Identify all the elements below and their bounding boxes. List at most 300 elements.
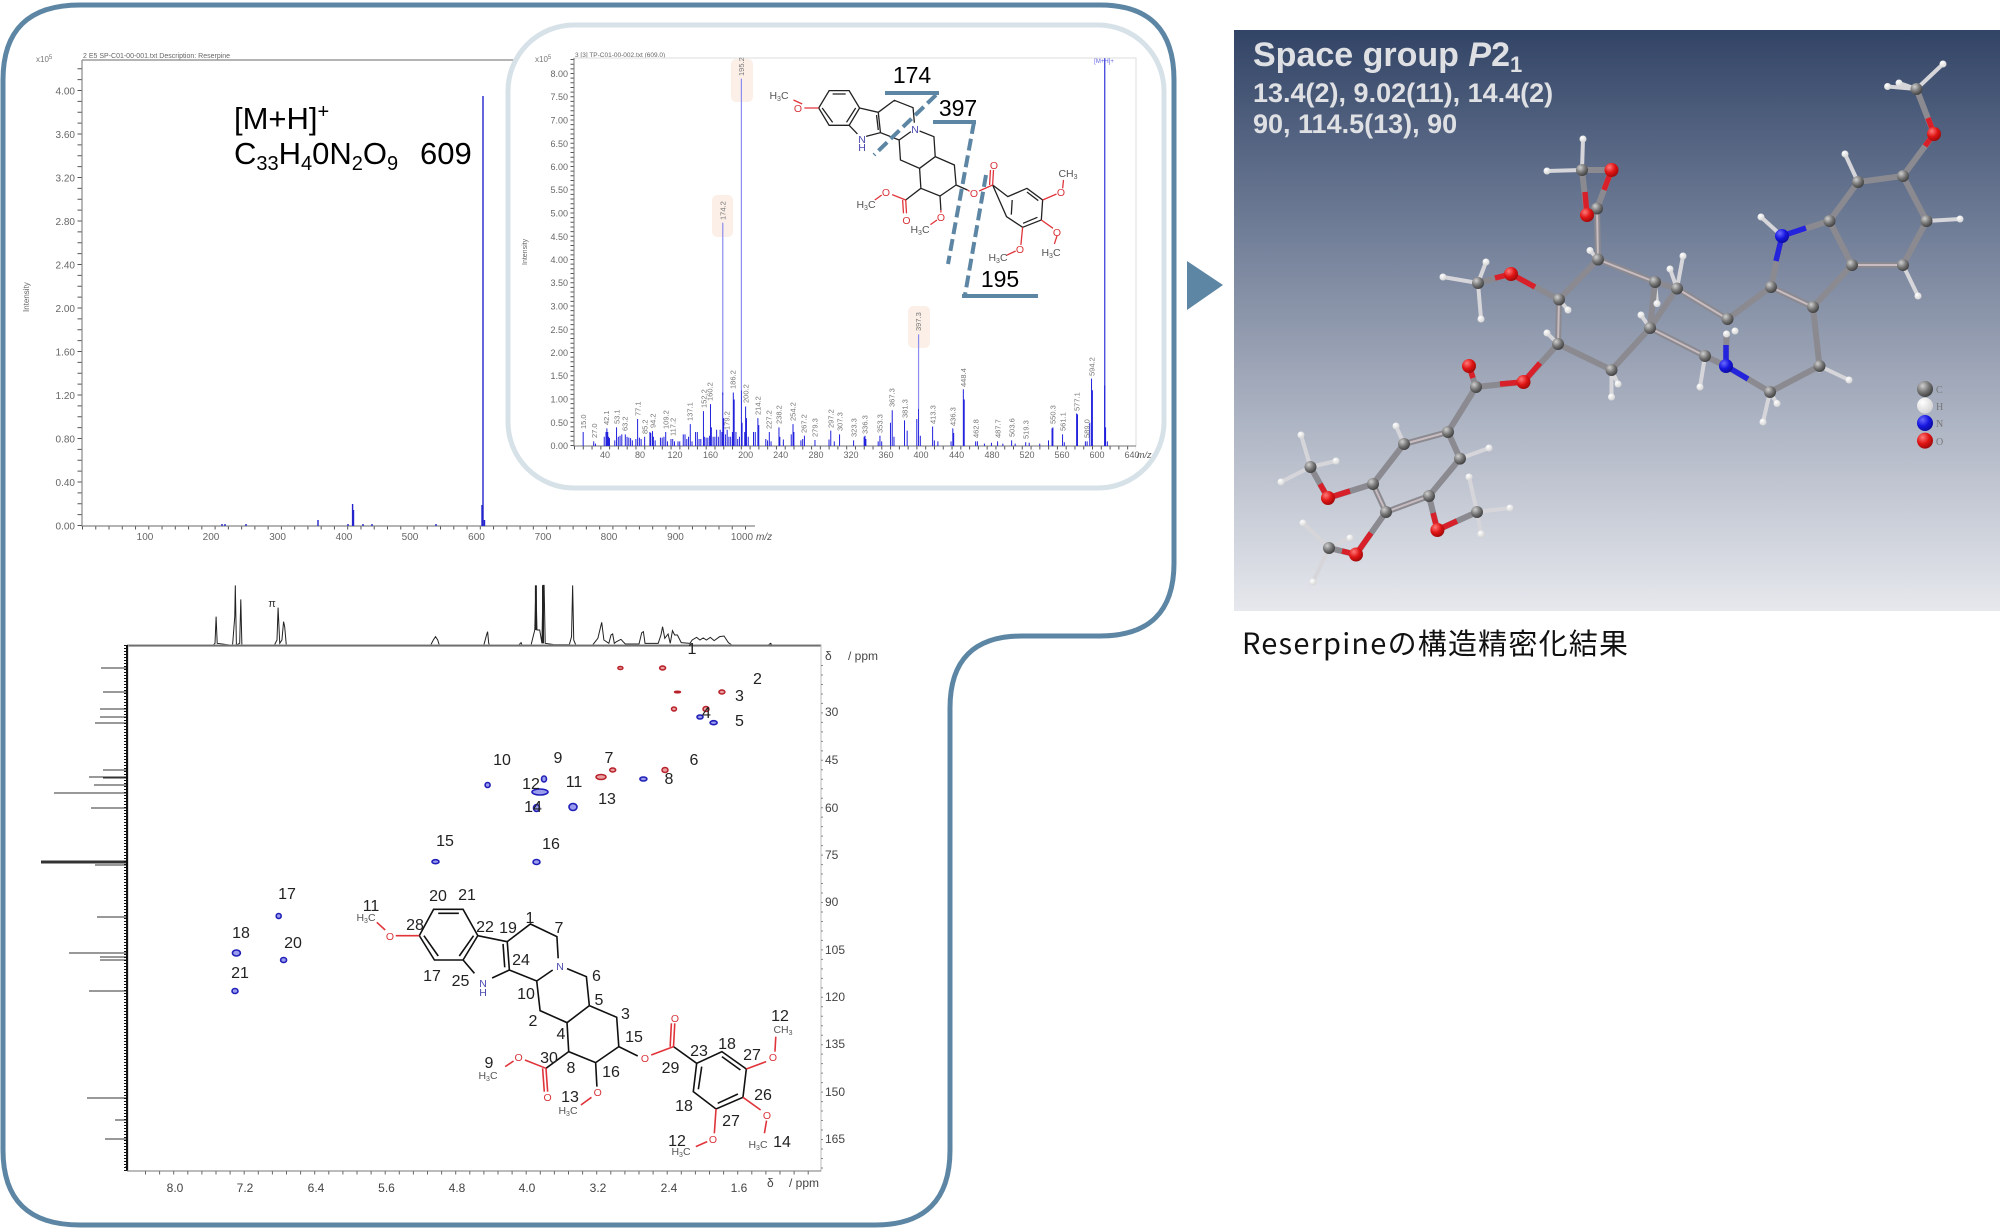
label: [M+H]+: +: [318, 101, 329, 123]
label: formula and mass: C: [234, 136, 256, 171]
f1 axis labels: 105: [825, 943, 845, 957]
carbon number labels: 29: [662, 1060, 680, 1077]
atom labels: H: [748, 1139, 756, 1151]
atom labels: N: [556, 961, 564, 973]
f1 axis labels: 45: [825, 753, 839, 767]
x axis labels: 600: [1089, 450, 1105, 460]
f2 axis labels: 4.0: [519, 1181, 536, 1195]
label: formula and mass: 9: [387, 153, 398, 175]
carbon number labels: 20: [429, 888, 447, 905]
carbon number labels: 5: [595, 992, 604, 1009]
cross peak labels: 6: [690, 752, 699, 769]
text: molecular ion: [234, 101, 472, 175]
caption: Reserpineの構造精密化結果: [1242, 621, 1629, 663]
carbon number labels: 30: [540, 1050, 558, 1067]
nitrogen atoms: [1719, 229, 1789, 373]
peak labels: 109.2: [662, 410, 670, 429]
atom labels: [769, 90, 1078, 265]
atom labels: 3: [789, 1030, 793, 1037]
legend: atom colours: C: [1936, 385, 1943, 396]
cross peak labels: 2: [753, 671, 762, 688]
atom labels: 3: [364, 918, 368, 925]
y axis labels: 3.00: [550, 302, 568, 312]
f2 axis unit: / ppm: [789, 1176, 819, 1190]
peak labels: 381.3: [900, 399, 910, 418]
f2 axis unit: δ: [767, 1176, 774, 1190]
atom labels: H: [988, 252, 996, 264]
x axis labels: 120: [667, 450, 683, 460]
fragment line: 195: [962, 175, 1038, 296]
y axis labels: 2.00: [550, 348, 568, 358]
x axis labels: 400: [336, 532, 353, 543]
fragment line: 397: [933, 122, 976, 264]
carbon number labels: 23: [690, 1043, 708, 1060]
f2 axis labels: [167, 1181, 748, 1195]
f1 axis labels: 60: [825, 801, 839, 815]
atom labels: 3: [566, 1111, 570, 1118]
x axis labels: 160: [703, 450, 718, 460]
top 1D spectrum: [127, 585, 821, 645]
text: cell angles: 90, 114.5(13), 90: [1253, 109, 1457, 139]
peak labels: 179.2: [722, 411, 732, 430]
diagram: numbered reserpine structure: [356, 887, 793, 1159]
y axis title: Intensity: [22, 282, 31, 312]
atom labels: O: [882, 187, 890, 199]
molecule model: [1278, 60, 1964, 586]
y axis labels: 0.40: [56, 478, 75, 489]
chart title: 2 E5 SP-C01-00-001.txt Description: Reserpine: [83, 53, 230, 60]
y axis unit: x10: [535, 55, 548, 64]
atom labels: O: [763, 1110, 771, 1122]
peak labels: 550.3: [1048, 405, 1058, 424]
f2 axis labels: 3.2: [590, 1181, 607, 1195]
peaks: [222, 96, 484, 526]
cross peak labels: 3: [735, 688, 744, 705]
peak labels: 227.2: [764, 410, 774, 429]
x axis labels: 500: [402, 532, 419, 543]
y axis labels: 5.50: [550, 185, 568, 195]
carbon number labels: 21: [458, 887, 476, 904]
x axis labels: 1000: [731, 532, 754, 543]
atom labels: 3: [756, 1145, 760, 1152]
f1 axis labels: [825, 705, 845, 1146]
atom labels: N: [479, 978, 487, 990]
text: cell lengths: 13.4(2), 9.02(11), 14.4(2): [1253, 78, 1553, 108]
y axis labels: 0.00: [56, 522, 75, 532]
f1 axis unit: / ppm: [848, 649, 878, 663]
cross peak labels: 20: [284, 935, 302, 952]
peak labels: 413.3: [928, 405, 938, 424]
y axis labels: 1.20: [56, 391, 75, 402]
panel: inset frame MS/MS: [508, 25, 1164, 488]
cross peak labels: 13: [598, 791, 616, 808]
atom labels: C: [1000, 252, 1008, 264]
x axis labels: 360: [878, 450, 894, 460]
chart: MS/MS spectrum: [522, 52, 1152, 460]
peak labels: 85.2: [640, 419, 650, 434]
cross peak labels: 17: [278, 886, 296, 903]
peak labels: 519.3: [1022, 420, 1030, 439]
hydrogen atoms: [1278, 60, 1964, 586]
y axis unit: 5: [49, 55, 53, 61]
fragment line: 174: [874, 93, 939, 155]
atom labels: O: [794, 103, 802, 115]
label: formula and mass: 609: [420, 136, 472, 171]
peaks: [583, 379, 1107, 446]
x axis labels: [137, 532, 754, 543]
y axis labels: 6.00: [550, 162, 568, 172]
y axis labels: [550, 69, 568, 451]
y axis labels: 6.50: [550, 139, 568, 149]
peak labels: 397.3: [914, 312, 923, 331]
peak labels: [579, 57, 1096, 439]
x axis unit: m/z: [1137, 450, 1152, 460]
x axis labels: 640: [1124, 450, 1140, 460]
x axis labels: 200: [203, 532, 220, 543]
carbon number labels: 26: [754, 1087, 772, 1104]
atom labels: 3: [1049, 253, 1053, 260]
atom labels: H: [478, 1070, 486, 1082]
peak labels: 307.3: [836, 412, 844, 431]
atom labels: C: [1053, 247, 1061, 259]
atom labels: N: [858, 134, 866, 146]
chart: 2D NMR HSQC: [41, 585, 878, 1195]
plot frame: [125, 645, 822, 1173]
atom labels: O: [594, 1087, 602, 1099]
cross peak labels: 14: [524, 799, 542, 816]
y axis labels: 2.00: [56, 304, 75, 315]
y axis labels: 0.80: [56, 434, 75, 446]
cross peak labels: 10: [493, 752, 511, 769]
y axis labels: 7.50: [550, 92, 568, 102]
f1 axis labels: 120: [825, 990, 845, 1004]
carbon number labels: 12: [668, 1133, 686, 1150]
label: formula and mass: 4: [301, 153, 312, 175]
atom labels: O: [641, 1053, 649, 1065]
hydrogen bonds: [1281, 64, 1960, 582]
carbon number labels: 25: [452, 973, 470, 990]
atom labels: O: [386, 931, 394, 943]
atom labels: O: [902, 215, 911, 227]
peak labels: 42.1: [602, 410, 611, 425]
bonds: [377, 909, 776, 1147]
y axis labels: 0.50: [550, 418, 568, 428]
carbon bonds: [1310, 89, 1934, 554]
panel background: [1234, 30, 2000, 611]
x axis labels: 320: [843, 450, 859, 460]
carbon number labels: 27: [743, 1047, 761, 1064]
peak labels: 336.3: [860, 415, 870, 434]
cross peak labels: 16: [542, 836, 560, 853]
atom labels: CH: [1058, 168, 1074, 180]
peak labels: 323.3: [850, 418, 858, 437]
x axis labels: 700: [535, 532, 552, 543]
x axis labels: 400: [913, 450, 929, 460]
peak labels: 27.0: [590, 423, 599, 438]
atom labels: 3: [486, 1076, 490, 1083]
peak labels: 462.8: [972, 419, 980, 438]
atom labels: H: [910, 224, 918, 236]
atom labels: 3: [996, 258, 1000, 265]
carbon number labels: 28: [406, 917, 424, 934]
atom labels: H: [858, 142, 866, 154]
atom labels: H: [769, 90, 777, 102]
y axis labels: 5.00: [550, 208, 568, 218]
f2 axis labels: 1.6: [731, 1181, 748, 1195]
peak labels: 195.2: [737, 57, 746, 76]
cross peak labels: 4: [702, 705, 711, 722]
x axis labels: 240: [773, 450, 788, 460]
impurity mark: π: [268, 598, 276, 610]
carbon number labels: [363, 887, 791, 1151]
cross peaks: blue: [232, 715, 717, 994]
x axis labels: 300: [269, 532, 286, 543]
carbon number labels: 16: [602, 1064, 620, 1081]
peak labels: 279.3: [810, 418, 820, 437]
atom labels: O: [970, 188, 978, 200]
peak labels: 267.2: [800, 414, 808, 433]
carbon number labels: 10: [517, 986, 535, 1003]
legend: atom colours: [1917, 381, 1943, 449]
atom labels: O: [769, 1052, 777, 1064]
peak labels: 367.3: [888, 388, 896, 407]
peak labels: 15.0: [579, 414, 588, 429]
axes: [572, 58, 1136, 448]
atom labels: [356, 912, 793, 1159]
precursor tag: [M+H]+: [1094, 59, 1114, 65]
peak labels: 152.2: [700, 389, 708, 408]
peak labels: 186.2: [728, 370, 738, 389]
f1 axis unit: δ: [825, 649, 832, 663]
legend: atom colours: O: [1936, 437, 1943, 448]
f1 axis labels: 90: [825, 895, 839, 909]
x axis labels: 440: [949, 450, 964, 460]
f2 axis labels: 2.4: [661, 1181, 678, 1195]
carbon number labels: 27: [722, 1113, 740, 1130]
axes: [80, 60, 755, 528]
label: formula and mass: 0N: [312, 136, 352, 171]
atom labels: 3: [1074, 174, 1078, 181]
atom labels: H: [558, 1105, 566, 1117]
panel: outer frame around spectra: [3, 5, 1174, 1225]
atom labels: H: [479, 987, 487, 999]
peak: precursor: [1104, 58, 1106, 446]
atom labels: O: [990, 160, 998, 172]
cross peak labels: 5: [735, 713, 744, 730]
y axis labels: 2.40: [56, 260, 75, 272]
f1 axis labels: 30: [825, 705, 839, 719]
label: [M+H]+: [M+H]: [234, 101, 318, 136]
atom labels: 3: [777, 96, 781, 103]
carbon number labels: 1: [526, 910, 535, 927]
highlight on bonds: [1373, 208, 1903, 512]
y axis labels: 4.00: [550, 255, 568, 265]
peak labels: 117.2: [668, 418, 678, 436]
nitrogen half bonds: [1726, 228, 1806, 379]
bonds: [793, 91, 1064, 255]
carbon number labels: 18: [718, 1036, 736, 1053]
y axis labels: 0.00: [550, 441, 568, 451]
x axis labels: 80: [635, 450, 645, 460]
peak labels: 487.7: [994, 419, 1002, 438]
y axis labels: 7.00: [550, 116, 568, 126]
y axis labels: 4.00: [56, 86, 75, 98]
atom labels: O: [937, 212, 945, 224]
chart: full mass spectrum: [22, 53, 772, 543]
carbon number labels: 9: [485, 1055, 494, 1072]
peak labels: 63.2: [620, 416, 630, 431]
cross peak labels: 15: [436, 833, 454, 850]
f2 axis labels: 8.0: [167, 1181, 184, 1195]
peak labels: 214.2: [754, 396, 762, 415]
carbon number labels: 8: [567, 1060, 576, 1077]
cross peak labels: 9: [554, 750, 563, 767]
oxygen atoms: [1321, 127, 1941, 562]
label: formula and mass: 2: [352, 153, 363, 175]
y axis labels: 1.60: [56, 348, 75, 358]
diagram: reserpine structure with fragments: [769, 62, 1078, 296]
carbon number labels: 6: [592, 968, 601, 985]
x axis labels: 100: [137, 532, 154, 543]
panel: crystal structure: [1234, 30, 2000, 611]
peak labels: 503.6: [1008, 418, 1016, 437]
y axis labels: 3.20: [56, 174, 75, 184]
cross peak labels: 7: [605, 750, 614, 767]
cross peak labels: 1: [688, 641, 697, 658]
x axis labels: 480: [984, 450, 1000, 460]
label: formula and mass: O: [363, 136, 387, 171]
x axis labels: 280: [808, 450, 824, 460]
atom labels: C: [760, 1139, 768, 1151]
cross peak labels: 18: [232, 925, 250, 942]
atom labels: C: [781, 90, 789, 102]
x axis unit: m/z: [756, 532, 772, 543]
x axis labels: 600: [468, 532, 485, 543]
heading: space group: Space group P2: [1253, 36, 1510, 74]
atom labels: C: [570, 1105, 578, 1117]
label: 397: 397: [939, 95, 977, 121]
carbon number labels: 2: [529, 1013, 538, 1030]
peak labels: 94.2: [648, 413, 658, 428]
peak labels: 594.2: [1088, 357, 1096, 376]
peak labels: 436.3: [948, 407, 958, 426]
y axis labels: 4.50: [550, 232, 568, 242]
f1 axis labels: 150: [825, 1085, 845, 1099]
atom labels: C: [683, 1146, 691, 1158]
cross peak labels: [231, 641, 762, 982]
f2 axis labels: 4.8: [449, 1181, 466, 1195]
peak labels: 589.0: [1082, 419, 1092, 438]
y axis labels: 3.50: [550, 278, 568, 288]
x axis labels: 200: [738, 450, 753, 460]
oxygen half bonds: [1320, 118, 1934, 554]
x axis labels: 520: [1019, 450, 1035, 460]
cross peak labels: 11: [566, 774, 582, 791]
chart title: 3 [3] TP-C01-00-002.txt (609.0): [575, 52, 665, 59]
carbon atoms: [1304, 83, 1932, 554]
label: formula and mass: H: [279, 136, 301, 171]
x axis labels: 560: [1054, 450, 1070, 460]
x axis labels: 800: [601, 532, 618, 543]
x axis labels: [600, 450, 1140, 460]
atom labels: CH: [773, 1024, 789, 1036]
cross peaks: red: [596, 666, 725, 780]
peak labels: 254.2: [788, 402, 798, 421]
peak labels: 160.2: [706, 382, 714, 401]
peak labels: 561.1: [1058, 412, 1068, 431]
atom labels: O: [1057, 187, 1065, 199]
f1 axis labels: 75: [825, 848, 839, 862]
y axis title: Intensity: [522, 238, 529, 265]
atom labels: O: [544, 1092, 552, 1104]
atom labels: O: [515, 1052, 523, 1064]
label: 174: 174: [893, 62, 931, 88]
peak highlights: [712, 59, 930, 348]
carbon number labels: 11: [363, 898, 379, 915]
f2 axis labels: 6.4: [308, 1181, 325, 1195]
x axis labels: 40: [600, 450, 610, 460]
cross peak labels: 8: [665, 771, 674, 788]
cross peak labels: 12: [522, 776, 540, 793]
carbon number labels: 7: [555, 920, 564, 937]
peak labels: 448.4: [959, 368, 968, 387]
y axis labels: 3.60: [56, 130, 75, 141]
label: formula and mass: 33: [256, 153, 279, 175]
f2 axis labels: 5.6: [378, 1181, 395, 1195]
label: 195: 195: [981, 266, 1019, 292]
x axis labels: 900: [667, 532, 684, 543]
atom labels: 3: [679, 1152, 683, 1159]
atom labels: 3: [864, 205, 868, 212]
carbon number labels: 18: [675, 1098, 693, 1115]
peak labels: 200.2: [742, 384, 750, 403]
atom labels: O: [671, 1013, 679, 1025]
f1 axis labels: 165: [825, 1132, 845, 1146]
y axis labels: 1.00: [550, 394, 568, 404]
peak labels: 353.3: [876, 414, 884, 433]
carbon number labels: 19: [499, 920, 517, 937]
peak labels: 577.1: [1072, 392, 1082, 411]
y axis unit: x10: [36, 55, 49, 64]
arrow: [1187, 261, 1223, 310]
atom labels: O: [709, 1134, 717, 1146]
carbon number labels: 14: [773, 1134, 791, 1151]
y axis labels: 2.80: [56, 217, 75, 228]
atom labels: 3: [918, 230, 922, 237]
carbon number labels: 24: [512, 952, 530, 969]
carbon number labels: 22: [476, 919, 494, 936]
atom labels: C: [368, 912, 376, 924]
cross peak labels: 21: [231, 965, 249, 982]
atom labels: O: [1053, 227, 1061, 239]
carbon number labels: 3: [621, 1006, 630, 1023]
atom labels: N: [911, 124, 919, 136]
atom labels: H: [356, 912, 364, 924]
peak labels: 137.1: [686, 402, 694, 421]
atom labels: H: [856, 199, 864, 211]
f2 axis labels: 7.2: [237, 1181, 254, 1195]
y axis unit: 5: [548, 55, 552, 61]
tall light peaks: [723, 79, 919, 409]
carbon number labels: 17: [423, 968, 441, 985]
left 1D spectrum: [41, 668, 127, 1167]
y axis labels: 1.50: [550, 371, 568, 381]
carbon number labels: 4: [557, 1026, 566, 1043]
peak labels: 174.2: [718, 201, 728, 220]
y axis labels: [56, 86, 75, 532]
atom labels: O: [1016, 244, 1024, 256]
legend: atom colours: N: [1936, 419, 1943, 430]
